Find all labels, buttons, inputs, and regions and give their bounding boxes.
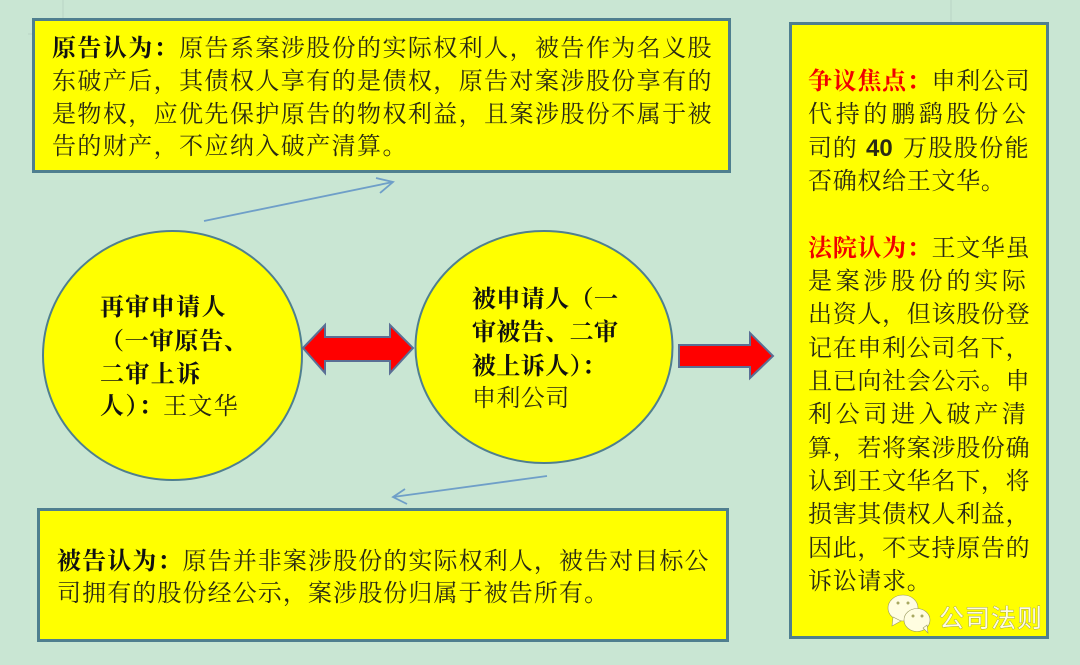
text: respondent: 申利公司 (472, 378, 570, 413)
text: court opinion: 利公司进入破产清 (808, 394, 1030, 429)
text: court opinion: 法院认为：王文华虽 (808, 228, 1030, 263)
text: plaintiff's argument: 告的财产，不应纳入破产清算。 (52, 126, 408, 161)
text: court opinion: 且已向社会公示。申 (808, 361, 1030, 396)
text: court opinion: 因此，不支持原告的 (808, 528, 1030, 563)
arrow: to plaintiff's argument (204, 178, 393, 221)
watermark: WeChat logo and account name (888, 595, 1043, 635)
text: applicant: 王文华 (163, 386, 239, 421)
panel: defendant's argument (38, 510, 728, 640)
text: court opinion: 诉讼请求。 (808, 561, 932, 596)
panel: dispute focus and court opinion (790, 24, 1048, 638)
text: defendant's argument: 被告认为：原告并非案涉股份的实际权利人，被告对目标公 (57, 541, 710, 576)
icon: WeChat bubbles (888, 595, 930, 633)
text: applicant: 再审申请人 (100, 287, 227, 322)
text: plaintiff's argument: 原告认为：原告系案涉股份的实际权利人，被告作为名义股 (52, 28, 713, 63)
text: defendant's argument: 司拥有的股份经公示，案涉股份归属于被告所有。 (57, 573, 609, 608)
text: dispute focus (808, 61, 1030, 196)
text: plaintiff's argument: 是物权，应优先保护原告的物权利益，且案涉股份不属于被 (52, 94, 713, 129)
text: applicant: （一审原告、 (100, 321, 249, 356)
text: dispute focus: 司的 (808, 128, 857, 163)
text: defendant's argument (57, 541, 710, 608)
text: court opinion: 是案涉股份的实际 (808, 261, 1030, 296)
text: respondent: 被申请人（一 (472, 279, 618, 314)
text: respondent: 审被告、二审 (472, 312, 618, 347)
circle: applicant (43, 231, 302, 480)
text: court opinion (808, 228, 1030, 596)
text: dispute focus: 否确权给王文华。 (808, 161, 1006, 196)
text: account name: 公司法则 (939, 599, 1043, 635)
text: dispute focus: 万股股份能 (903, 128, 1030, 163)
arrow: to defendant's argument (393, 476, 547, 504)
text: court opinion: 记在申利公司名下， (808, 328, 1030, 363)
text: court opinion: 认到王文华名下，将 (808, 461, 1030, 496)
text: dispute focus: 代持的鹏鹞股份公 (808, 94, 1030, 129)
panel: plaintiff's argument (34, 20, 730, 172)
text: applicant (100, 287, 249, 421)
double arrow between parties (303, 325, 413, 373)
text: court opinion: 损害其债权人利益， (808, 494, 1030, 529)
text: plaintiff's argument: 东破产后，其债权人享有的是债权，原告对案涉股份享有的 (52, 61, 713, 96)
circle: respondent (416, 231, 672, 463)
text: respondent (472, 279, 618, 413)
text: respondent: 被上诉人）： (472, 346, 606, 381)
text: applicant: 二审上诉 (100, 354, 202, 389)
text: court opinion: 算，若将案涉股份确 (808, 428, 1030, 463)
text: applicant: 人）： (100, 386, 164, 421)
text: court opinion: 出资人，但该股份登 (808, 294, 1030, 329)
arrow: to court panel (679, 333, 773, 378)
text: dispute focus: 争议焦点：申利公司 (808, 61, 1030, 96)
text: dispute focus: 40 (866, 135, 893, 162)
text: plaintiff's argument (52, 28, 713, 161)
